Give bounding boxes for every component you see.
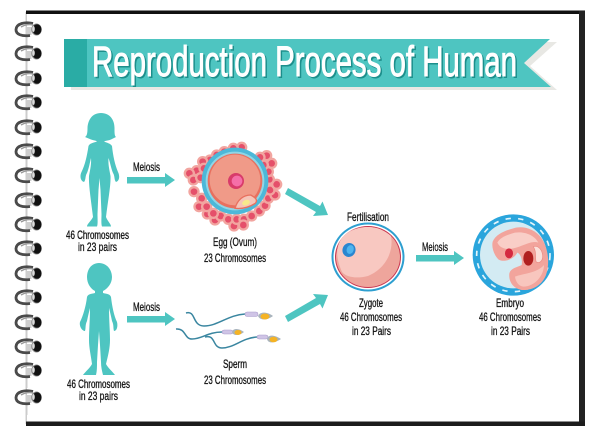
label: meiosis right: Meiosis	[422, 240, 448, 254]
embryo caption: Embryo	[496, 296, 524, 310]
label: meiosis top: Meiosis	[133, 160, 160, 174]
embryo caption	[479, 296, 541, 338]
female caption	[66, 228, 129, 254]
female silhouette	[80, 113, 119, 226]
arrow: sperm to zygote	[285, 294, 328, 322]
spiral binding	[16, 23, 42, 415]
sperm caption	[204, 357, 266, 387]
label: meiosis bottom: Meiosis	[133, 300, 160, 314]
arrow: egg to zygote	[285, 188, 328, 216]
zygote caption: in 23 Pairs	[352, 324, 391, 338]
egg caption: Egg (Ovum)	[213, 235, 257, 249]
male caption	[67, 377, 130, 403]
embryo caption: 46 Chromosomes	[479, 310, 541, 324]
arrow: female to egg	[127, 173, 175, 187]
icon: zygote	[332, 222, 404, 292]
egg caption: 23 Chromosomes	[204, 251, 266, 265]
icon: sperm cells	[176, 312, 281, 348]
arrow: male to sperm	[127, 312, 175, 326]
zygote caption: Zygote	[359, 296, 383, 310]
zygote caption: 46 Chromosomes	[340, 310, 402, 324]
label: fertilisation: Fertilisation	[347, 210, 389, 224]
egg caption	[204, 235, 266, 265]
title banner	[64, 38, 557, 90]
icon: egg	[184, 142, 282, 232]
female caption: 46 Chromosomes	[66, 228, 129, 242]
sperm caption: Sperm	[223, 357, 247, 371]
arrow: zygote to embryo	[416, 251, 464, 265]
icon: embryo	[473, 214, 554, 296]
zygote caption	[340, 296, 402, 338]
female caption: in 23 pairs	[78, 240, 117, 254]
embryo caption: in 23 Pairs	[491, 324, 530, 338]
male caption: in 23 pairs	[79, 389, 118, 403]
sperm caption: 23 Chromosomes	[204, 373, 266, 387]
male silhouette	[80, 263, 117, 375]
male caption: 46 Chromosomes	[67, 377, 130, 391]
